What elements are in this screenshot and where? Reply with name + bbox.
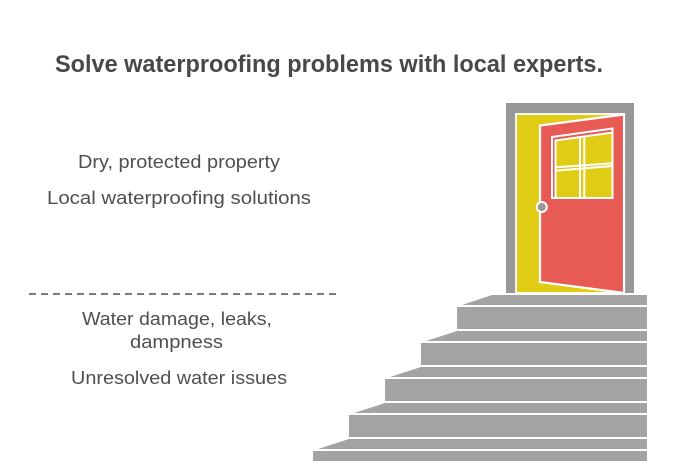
door leaf [540,114,624,293]
label: water damage: Water damage, leaks, [82,309,272,329]
step 4 [349,403,647,437]
text block: current problems [71,309,287,388]
label: dampness: dampness [130,332,223,352]
door opening [516,114,624,293]
label: unresolved issues: Unresolved water issues [71,368,287,388]
icon: open door [506,103,634,293]
step 1 [457,295,647,329]
step 3 [385,367,647,401]
label: local solutions: Local waterproofing solutions [47,188,311,208]
door frame [506,103,634,293]
text block: positive outcomes [47,152,311,208]
step 5 [313,439,647,461]
door knob [537,202,547,212]
door window [552,128,612,198]
title: Solve waterproofing problems with local experts. [55,51,603,78]
staircase [313,295,647,461]
step 2 [421,331,647,365]
label: dry property: Dry, protected property [78,152,280,172]
